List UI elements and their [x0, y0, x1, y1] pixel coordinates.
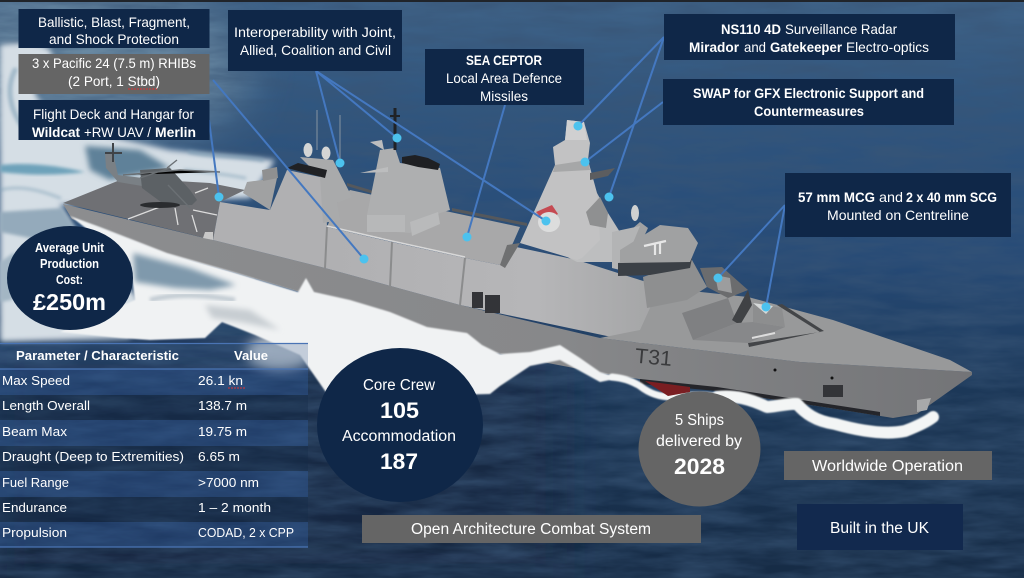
hull marking T31: T31	[634, 345, 673, 371]
badge: open architecture: Open Architecture Combat System	[411, 521, 651, 538]
annotation leader lines	[209, 37, 785, 307]
helicopter	[105, 143, 220, 208]
callout: flight deck: Merlin	[155, 124, 196, 140]
circle: production cost: £250m	[33, 289, 106, 315]
table rows: 19.75 m	[198, 424, 247, 439]
callout: protection	[18, 9, 210, 48]
side wall	[325, 227, 748, 345]
callout: sea ceptor: Local Area Defence	[446, 70, 562, 86]
hull details	[472, 292, 843, 397]
circle: crew: 105	[380, 398, 419, 423]
callout: flight deck: +RW UAV /	[84, 124, 151, 140]
table header	[16, 348, 268, 363]
callout: SWAP: SWAP for GFX Electronic Support and	[693, 85, 924, 101]
circle: crew: 187	[380, 449, 418, 474]
circle: production cost	[7, 226, 133, 330]
callout: flight deck	[18, 100, 210, 140]
callout: RHIBs: 3 x Pacific 24 (7.5 m) RHIBs	[32, 55, 196, 71]
badge: built in the UK	[797, 504, 963, 550]
table rows: 1 – 2 month	[198, 500, 271, 515]
callout: interoperability: Interoperability with Joint,	[234, 24, 396, 40]
circle: production cost: Average Unit	[35, 240, 105, 255]
callout: guns: 2 x 40 mm SCG	[906, 189, 997, 205]
callout: interoperability: Allied, Coalition and Civil	[240, 42, 391, 58]
circle: production cost: Production	[40, 256, 99, 271]
anti-fouling hull strip	[645, 381, 690, 396]
callout: flight deck: Flight Deck and Hangar for	[33, 106, 194, 122]
table rows: 138.7 m	[198, 398, 247, 413]
callout: radar: NS110 4D	[721, 21, 781, 37]
badge: worldwide operation: Worldwide Operation	[812, 458, 963, 475]
annotation dots	[214, 122, 770, 312]
fore deck	[600, 286, 972, 372]
circle: delivery	[638, 392, 760, 506]
callout: SWAP: Countermeasures	[754, 103, 864, 119]
table header: Parameter / Characteristic	[16, 348, 179, 363]
badge: worldwide operation	[784, 451, 992, 480]
callout: interoperability	[228, 10, 402, 71]
aft mast	[300, 157, 352, 223]
main tower	[540, 193, 623, 262]
callout: radar: Gatekeeper	[770, 39, 843, 55]
table header: Value	[234, 348, 268, 363]
table rows: Propulsion	[2, 525, 67, 540]
table rows: 26.1 kn	[198, 373, 243, 388]
callout: RHIBs: (2 Port, 1 Stbd)	[68, 73, 160, 89]
table rows: Beam Max	[2, 424, 68, 439]
table rows: >7000 nm	[198, 475, 259, 490]
table rows: Endurance	[2, 500, 67, 515]
callout: radar: Mirador	[689, 39, 740, 55]
table rows	[2, 373, 294, 540]
table rows: Length Overall	[2, 398, 90, 413]
callout: guns	[785, 173, 1011, 237]
callout: flight deck: Wildcat	[32, 124, 80, 140]
circle: delivery: 5 Ships	[675, 412, 724, 429]
callout: radar: Surveillance Radar	[785, 21, 897, 37]
circle: crew	[317, 348, 483, 502]
specification table	[0, 344, 308, 547]
badge: built in the UK: Built in the UK	[830, 520, 930, 537]
callout: guns: 57 mm MCG	[798, 189, 875, 205]
hangar block	[213, 170, 327, 268]
badge: open architecture	[362, 515, 701, 543]
table row bands	[0, 344, 308, 547]
table rows: CODAD, 2 x CPP	[198, 525, 294, 540]
circle: delivery: delivered by	[656, 433, 742, 450]
table rows: Draught (Deep to Extremities)	[2, 449, 184, 464]
circle: production cost: Cost:	[56, 272, 83, 287]
callout: guns: and	[879, 189, 903, 205]
ship	[63, 108, 972, 418]
main deck amidships	[327, 190, 520, 265]
hangar roof cap	[287, 163, 327, 178]
callout: sea ceptor: SEA CEPTOR	[466, 52, 542, 68]
table rows: Fuel Range	[2, 475, 69, 490]
callout: radar	[664, 14, 955, 60]
fore guns	[700, 267, 748, 298]
callout: guns: Mounted on Centreline	[827, 207, 969, 223]
callout: radar: and	[744, 39, 766, 55]
circle: delivery: 2028	[674, 454, 725, 479]
main foam	[60, 216, 620, 398]
callout: protection: Ballistic, Blast, Fragment,	[38, 14, 190, 30]
callout: sea ceptor: Missiles	[480, 88, 528, 104]
callout: radar: Electro-optics	[846, 39, 929, 55]
callout: protection: and Shock Protection	[49, 31, 179, 47]
hull	[63, 204, 972, 418]
midship mast	[367, 148, 450, 233]
callout: SWAP	[663, 79, 954, 125]
aft boxes	[243, 178, 277, 210]
wake behind the stern	[0, 43, 275, 342]
callout: sea ceptor	[425, 49, 584, 105]
table rows: 6.65 m	[198, 449, 240, 464]
bridge	[612, 226, 640, 270]
bow wave foam	[612, 377, 933, 433]
circle: crew: Core Crew	[363, 377, 436, 394]
flight deck	[63, 178, 245, 240]
table rows: Max Speed	[2, 373, 70, 388]
circle: crew: Accommodation	[342, 428, 456, 445]
callout: RHIBs	[18, 54, 210, 94]
